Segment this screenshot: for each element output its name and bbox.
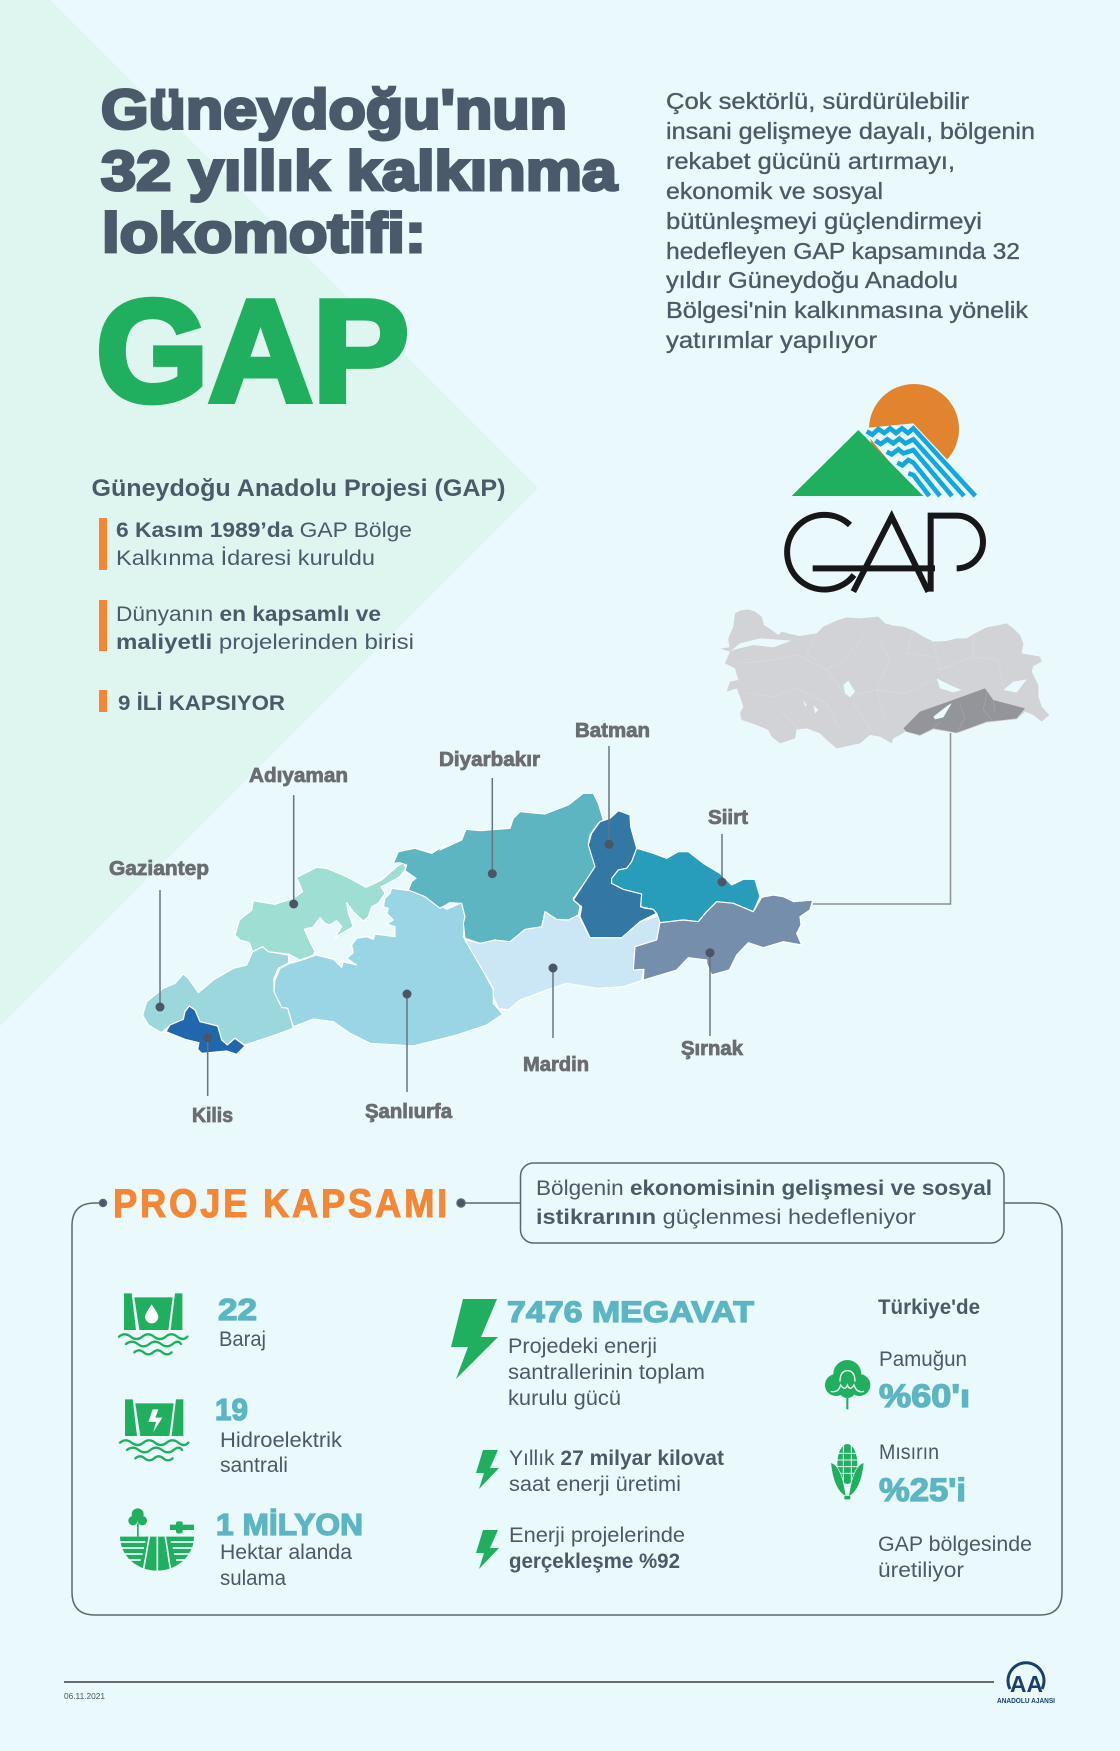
panel: GAP facts (92, 475, 506, 715)
map: GAP provinces (143, 793, 813, 1054)
intro paragraph: Bölgesi'nin kalkınmasına yönelik (666, 297, 1029, 323)
text: GAP bölgesinde üretiliyor (878, 1533, 1032, 1582)
stat: 7476 Megavat: Projedeki enerji (508, 1335, 657, 1358)
label: Kilis (192, 1033, 233, 1127)
icon: dam with water drop (119, 1293, 187, 1354)
label: Batman (575, 720, 650, 849)
intro paragraph: ekonomik ve sosyal (666, 178, 883, 204)
title: lokomotifi: (102, 201, 426, 264)
stat: 1 Milyon hektar sulama: 1 MİLYON (216, 1507, 363, 1542)
fact: 6 Kasım 1989: Kalkınma İdaresi kuruldu (116, 547, 375, 570)
intro paragraph: hedefleyen GAP kapsamında 32 (666, 238, 1020, 264)
fact: 6 Kasım 1989: 6 Kasım 1989’da GAP Bölge (116, 519, 412, 542)
title: Güneydoğu'nun (101, 78, 567, 140)
stat: 19 Hidroelektrik santrali: 19 (215, 1392, 248, 1427)
icon: small lightning bolt (476, 1450, 499, 1489)
icon: dam with lightning (120, 1399, 188, 1460)
stat: gerçekleşme %92 (476, 1524, 685, 1573)
icon: corn (831, 1444, 864, 1499)
label: Gaziantep: Gaziantep (109, 858, 209, 880)
stat: mısır: %25'i (879, 1472, 966, 1508)
map: Turkey locator (720, 609, 1049, 753)
intro paragraph: yatırımlar yapılıyor (666, 327, 877, 353)
fact: 9 ili kapsıyor: 9 İLİ KAPSIYOR (118, 692, 285, 715)
callout: project goal (520, 1163, 1004, 1243)
label: Adıyaman: Adıyaman (249, 765, 348, 787)
stat: gerçekleşme %92: Enerji projelerinde (509, 1524, 685, 1547)
text: GAP bölgesinde üretiliyor: GAP bölgesinde (878, 1533, 1032, 1556)
callout: project goal: istikrarının güçlenmesi hedefleniyor (536, 1206, 916, 1229)
stat: 27 milyar kilovat: Yıllık 27 milyar kilovat (509, 1447, 724, 1470)
intro paragraph: yıldır Güneydoğu Anadolu (666, 267, 958, 293)
stat: 7476 Megavat (451, 1296, 754, 1410)
heading: Proje Kapsamı: PROJE KAPSAMI (113, 1182, 450, 1226)
label: Mardin (523, 964, 589, 1076)
footer line and date: 06.11.2021 (64, 1691, 105, 1701)
label: Mardin: Mardin (523, 1054, 589, 1076)
label: Diyarbakır (439, 749, 540, 878)
stat: 1 Milyon hektar sulama (120, 1507, 363, 1590)
panel: Proje Kapsamı frame (72, 1199, 1062, 1615)
fact: en kapsamlı: maliyetli projelerinden birisi (116, 631, 414, 654)
stat: pamuk: %60'ı (879, 1378, 970, 1414)
big heading: GAP: GAP (96, 270, 409, 432)
label: Adıyaman (249, 765, 348, 908)
label: Şırnak: Şırnak (681, 1038, 744, 1060)
intro paragraph (666, 88, 1035, 353)
label: Şanlıurfa: Şanlıurfa (365, 1101, 453, 1123)
title (101, 78, 618, 264)
heading: Türkiye'de: Türkiye'de (878, 1296, 980, 1319)
stat: mısır: Mısırın (879, 1441, 939, 1464)
label: Kilis: Kilis (192, 1105, 233, 1127)
intro paragraph: rekabet gücünü artırmayı, (666, 148, 955, 174)
stat: 27 milyar kilovat: saat enerji üretimi (509, 1473, 681, 1496)
icon: GAP logo (787, 384, 983, 592)
icon: cotton (825, 1360, 870, 1409)
label: Siirt: Siirt (708, 807, 748, 829)
stat: gerçekleşme %92: gerçekleşme %92 (509, 1550, 680, 1573)
callout: project goal: Bölgenin ekonomisinin gelişmesi ve sosyal (536, 1177, 992, 1200)
label: Diyarbakır: Diyarbakır (439, 749, 540, 771)
stat: 1 Milyon hektar sulama: sulama (220, 1567, 286, 1590)
icon: Anadolu Ajansı logo: ANADOLU AJANSI (997, 1696, 1055, 1705)
label: Şırnak (681, 948, 744, 1060)
connector line from Turkey map to regional map (813, 733, 950, 904)
stat: mısır (831, 1441, 966, 1508)
stat: 1 Milyon hektar sulama: Hektar alanda (220, 1541, 352, 1564)
intro paragraph: insani gelişmeye dayalı, bölgenin (666, 118, 1035, 144)
stat: 7476 Megavat: kurulu gücü (508, 1387, 621, 1410)
icon: small lightning bolt (476, 1530, 499, 1569)
stat: pamuk (825, 1348, 970, 1414)
fact: en kapsamlı (99, 600, 414, 654)
fact: en kapsamlı: Dünyanın en kapsamlı ve (116, 603, 381, 626)
stat: 7476 Megavat: santrallerinin toplam (508, 1361, 705, 1384)
intro paragraph: bütünleşmeyi güçlendirmeyi (666, 208, 982, 234)
title: 32 yıllık kalkınma (101, 139, 618, 202)
stat: 19 Hidroelektrik santrali: Hidroelektrik (220, 1429, 343, 1452)
intro paragraph: Çok sektörlü, sürdürülebilir (666, 88, 969, 114)
stat: 19 Hidroelektrik santrali (120, 1392, 343, 1477)
label: Siirt (708, 807, 748, 886)
label: Batman: Batman (575, 720, 650, 742)
stat: 19 Hidroelektrik santrali: santrali (220, 1454, 288, 1477)
label: Gaziantep (109, 858, 209, 1012)
stat: 22 Baraj: 22 (218, 1292, 257, 1327)
stat: 22 Baraj: Baraj (219, 1328, 266, 1351)
stat: pamuk: Pamuğun (879, 1348, 967, 1371)
label: Şanlıurfa (365, 990, 453, 1123)
text: GAP bölgesinde üretiliyor: üretiliyor (878, 1559, 964, 1582)
icon: Anadolu Ajansı logo (997, 1663, 1055, 1705)
stat: 7476 Megavat: 7476 MEGAVAT (507, 1296, 754, 1329)
heading: Güneydoğu Anadolu Projesi: Güneydoğu Anadolu Projesi (GAP) (92, 475, 506, 502)
fact: 6 Kasım 1989 (99, 518, 412, 570)
icon: large lightning bolt (451, 1299, 498, 1379)
stat: 27 milyar kilovat (476, 1447, 724, 1496)
stat: 22 Baraj (119, 1292, 266, 1354)
icon: Anadolu Ajansı logo: AA (1010, 1671, 1043, 1697)
icon: irrigated field (120, 1508, 194, 1571)
